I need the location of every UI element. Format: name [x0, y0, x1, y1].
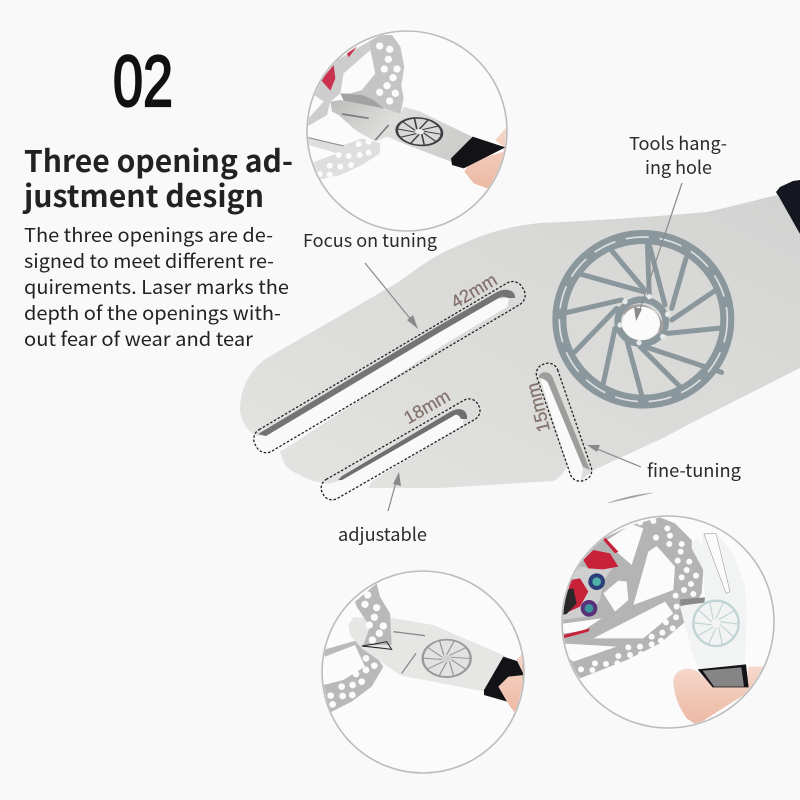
panel: bottom-right circle photo [560, 516, 774, 728]
panel: main tool: 18mm [400, 386, 454, 428]
handle [451, 137, 505, 168]
rotor rim [559, 237, 727, 402]
rotor lower [323, 638, 383, 713]
heading [22, 137, 293, 216]
rotor [560, 517, 703, 678]
number 02: 02 [113, 42, 173, 122]
mini rotor [693, 601, 739, 646]
arrow: fine tuning [587, 445, 641, 467]
mini rotor [395, 116, 443, 148]
slot 18mm [322, 409, 467, 492]
dashed outlines [250, 277, 594, 504]
rotor spokes [307, 42, 370, 127]
tool [680, 533, 747, 670]
bolts [581, 573, 605, 617]
body text: signed to meet different re- [24, 247, 274, 274]
rotor strip top [340, 35, 404, 114]
slot 15mm [539, 372, 590, 484]
handle [698, 664, 749, 687]
panel: main tool [240, 180, 800, 504]
heading: justment design [22, 172, 264, 216]
body text [24, 221, 289, 352]
body text: The three openings are de- [24, 221, 273, 248]
rotor strip lower [307, 137, 380, 179]
tool body [240, 195, 800, 488]
callout labels: Focus on tuning [303, 227, 437, 253]
arrow: adjustable [388, 472, 401, 511]
arrow: focus on tuning [365, 263, 418, 329]
callout labels: adjustable [338, 521, 427, 547]
mini rotor [423, 640, 471, 677]
arrows [365, 183, 682, 511]
callout labels: ing hole [645, 154, 712, 180]
heading: Three opening ad- [24, 137, 293, 181]
panel: bottom-left circle photo [322, 571, 527, 773]
caliper shadow [340, 93, 385, 110]
rotor upper [355, 583, 392, 649]
finger [673, 667, 764, 725]
size labels: 42mm [447, 269, 500, 312]
body text: depth of the openings with- [24, 299, 281, 326]
finger [464, 128, 506, 188]
body text: out fear of wear and tear [24, 325, 254, 352]
panel: top circle photo [307, 31, 510, 231]
finger [498, 654, 523, 712]
icon: engraved rotor [559, 237, 727, 402]
icon: handle [776, 180, 800, 234]
rotor hub [618, 300, 666, 344]
callout labels: Tools hang- [629, 130, 727, 156]
sliver shadow [608, 493, 652, 503]
callout labels: fine-tuning [647, 457, 741, 483]
rotor rim slots [559, 237, 727, 402]
callout labels [303, 130, 741, 547]
rotor spokes [563, 242, 725, 395]
panel: main tool: 15mm [522, 381, 554, 434]
handle [484, 657, 524, 703]
slot 42mm [250, 290, 515, 458]
body text: quirements. Laser marks the [24, 273, 289, 300]
tool [330, 100, 472, 162]
tool [348, 617, 507, 692]
caliper red [563, 537, 618, 638]
arrow: hanging hole [634, 183, 682, 321]
